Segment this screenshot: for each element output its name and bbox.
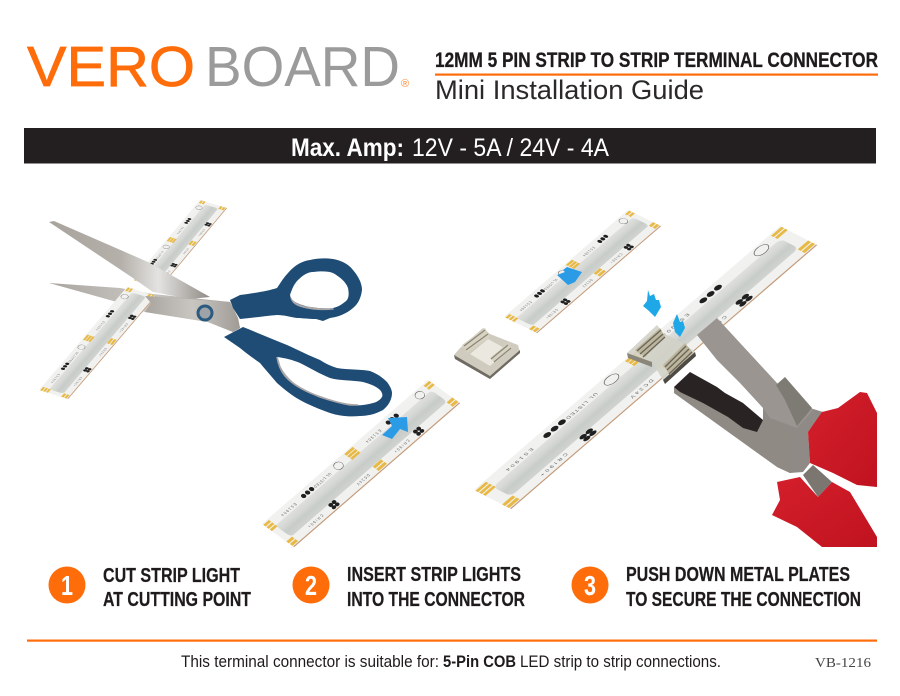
scissors pivot [196, 304, 214, 322]
logo: VeroBoard [27, 35, 409, 99]
pliers lower jaw [674, 372, 797, 473]
step 2: INTO THE CONNECTOR [347, 589, 525, 611]
step 1 [48, 565, 251, 611]
scissors upper handle [230, 258, 362, 321]
step 1: AT CUTTING POINT [103, 589, 251, 611]
arrow: insert [557, 267, 582, 285]
step 2: 2 [305, 570, 317, 601]
subtitle: Mini Installation Guide [435, 75, 704, 105]
logo: VeroBoard: VERO [27, 35, 195, 99]
step 1: 1 [61, 570, 73, 601]
part number: VB-1216 [815, 656, 871, 671]
step 2 illustration: upper strip with arrow [504, 210, 661, 333]
pliers body [763, 408, 823, 473]
step 3 [572, 564, 861, 611]
arrow: insert [382, 417, 408, 439]
step 3 illustration: strip and connector [474, 226, 817, 509]
step 3: 3 [584, 570, 596, 601]
pliers red grip lower [772, 477, 877, 547]
pliers upper jaw [697, 318, 813, 428]
scissors lower handle [224, 327, 392, 416]
banner: max amp: Max. Amp: [291, 134, 404, 162]
pliers red grip upper [808, 392, 877, 487]
step 2 [292, 564, 525, 611]
pliers gray centre piece [803, 465, 832, 497]
step 2: INSERT STRIP LIGHTS [347, 564, 521, 586]
step 1: CUT STRIP LIGHT [103, 565, 240, 587]
footer note: 5-Pin COB [443, 653, 516, 671]
footer note: This terminal connector is suitable for: [181, 653, 439, 671]
logo: VeroBoard: BOARD [205, 35, 400, 99]
pliers [674, 318, 877, 547]
banner: max amp: 12V - 5A / 24V - 4A [412, 134, 609, 162]
arrows: press down right [673, 314, 685, 337]
installed connector [627, 325, 696, 384]
footer note: LED strip to strip connections. [520, 653, 721, 671]
footer note [181, 653, 721, 671]
connector [454, 328, 520, 379]
step 3: PUSH DOWN METAL PLATES [626, 564, 850, 586]
logo: VeroBoard: ® [401, 78, 409, 90]
step 2 illustration: strip with arrow [262, 380, 460, 547]
step 1 illustration: strip and scissors [39, 200, 392, 416]
arrows: press down left [643, 290, 661, 317]
banner: max amp [24, 128, 876, 164]
